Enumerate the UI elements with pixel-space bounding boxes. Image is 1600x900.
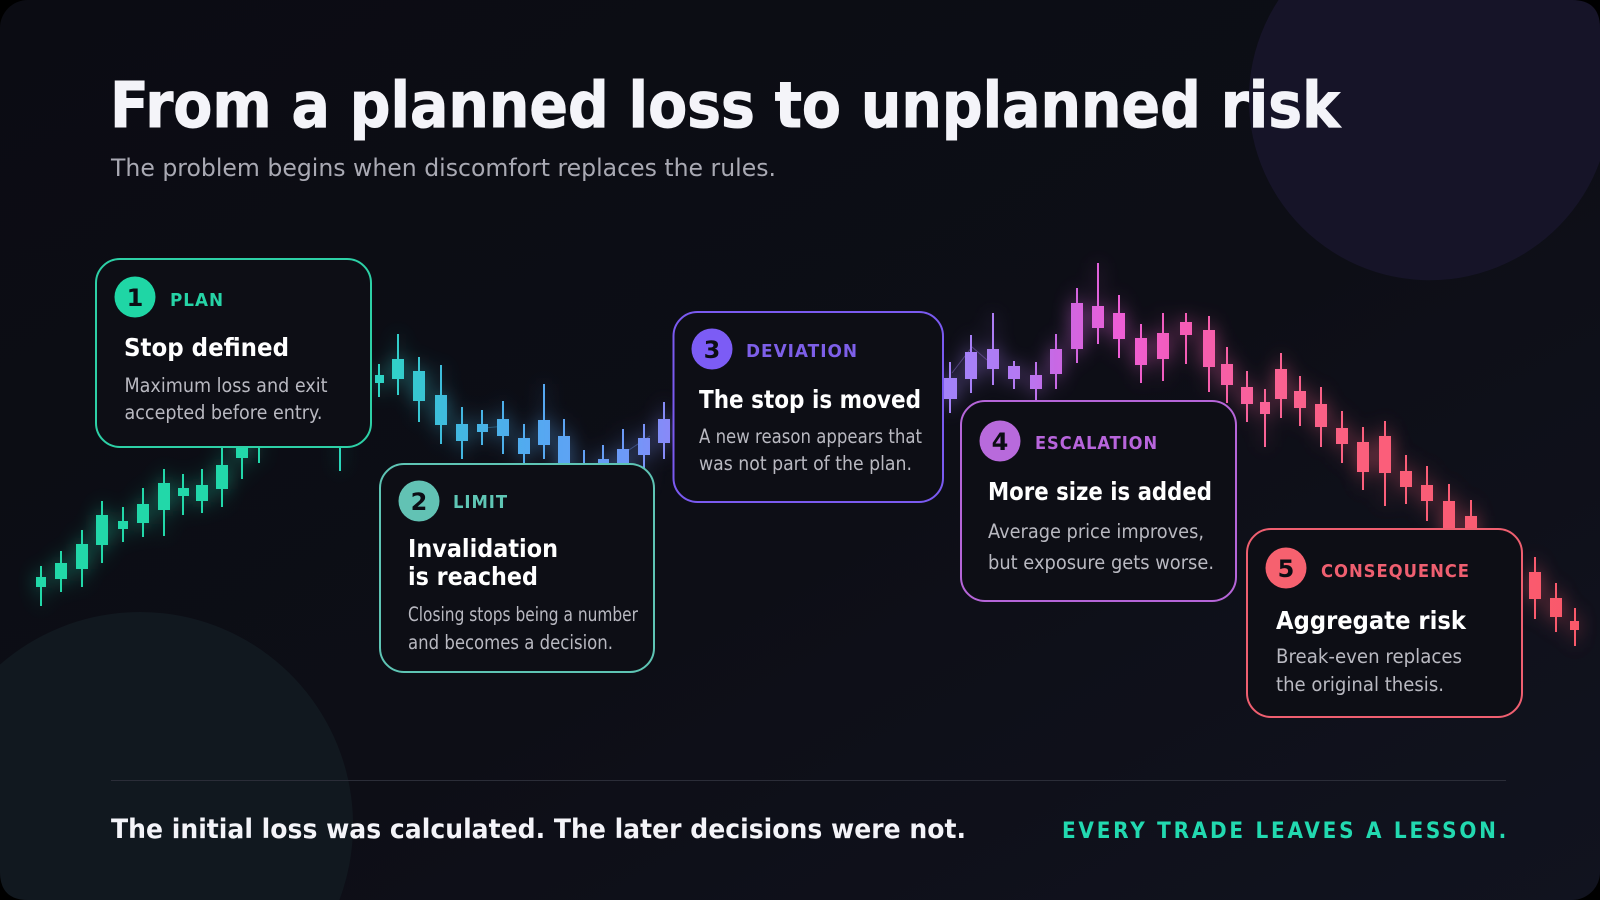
footer tagline: EVERY TRADE LEAVES A LESSON. xyxy=(1062,819,1509,844)
label: escalation: ESCALATION xyxy=(1035,434,1158,454)
badge 1 xyxy=(114,276,156,318)
candles: limit phase xyxy=(375,334,650,500)
badge 3: 3 xyxy=(704,336,720,364)
badge 2: 2 xyxy=(411,488,427,516)
candles: deviation phase xyxy=(484,313,1062,459)
description xyxy=(1276,645,1462,696)
description: but exposure gets worse. xyxy=(988,551,1214,574)
badge 3 xyxy=(692,328,732,370)
label: limit: LIMIT xyxy=(453,493,508,513)
description xyxy=(988,520,1214,574)
heading: more size is added: More size is added xyxy=(988,477,1212,506)
candles: falling consequence phase xyxy=(1260,353,1579,646)
footer statement: The initial loss was calculated. The later decisions were not. xyxy=(111,814,966,845)
description: was not part of the plan. xyxy=(699,452,912,475)
label: deviation: DEVIATION xyxy=(746,342,858,362)
heading: stop defined: Stop defined xyxy=(124,333,289,362)
heading: invalidation is reached: is reached xyxy=(408,562,538,591)
decorative circle top right xyxy=(1249,0,1600,280)
title: From a planned loss to unplanned risk xyxy=(110,69,1342,142)
card 2: limit xyxy=(380,464,654,672)
subtitle: The problem begins when discomfort replaces the rules. xyxy=(110,154,776,182)
description xyxy=(124,374,328,424)
heading: the stop is moved: The stop is moved xyxy=(699,385,921,414)
description: accepted before entry. xyxy=(124,401,322,424)
badge 5 xyxy=(1266,548,1306,588)
badge 5: 5 xyxy=(1278,555,1294,583)
candles: rising plan phase xyxy=(36,430,340,606)
badge 4 xyxy=(980,420,1020,462)
label: consequence: CONSEQUENCE xyxy=(1321,562,1470,582)
description: A new reason appears that xyxy=(699,425,922,448)
card 4: escalation xyxy=(961,401,1236,601)
description xyxy=(408,603,639,654)
description: and becomes a decision. xyxy=(408,631,613,654)
decorative circle bottom left xyxy=(0,612,353,900)
description: Closing stops being a number xyxy=(408,603,639,626)
description: Maximum loss and exit xyxy=(124,374,328,397)
badge 1: 1 xyxy=(127,284,143,312)
heading: invalidation is reached xyxy=(408,534,558,591)
badge 4: 4 xyxy=(992,428,1008,456)
description: Break-even replaces xyxy=(1276,645,1462,668)
card 5: consequence xyxy=(1247,529,1522,717)
description: Average price improves, xyxy=(988,520,1204,543)
heading: invalidation is reached: Invalidation xyxy=(408,534,558,563)
candlestick chart glow xyxy=(36,263,1579,646)
label: plan: PLAN xyxy=(170,291,224,311)
description xyxy=(699,425,922,475)
candlestick chart xyxy=(36,263,1579,646)
heading: aggregate risk: Aggregate risk xyxy=(1276,606,1467,635)
badge 2 xyxy=(398,480,440,522)
candles: escalation phase xyxy=(1071,263,1253,422)
description: the original thesis. xyxy=(1276,673,1444,696)
card 1: plan xyxy=(96,259,371,447)
card 3: deviation xyxy=(674,312,943,502)
